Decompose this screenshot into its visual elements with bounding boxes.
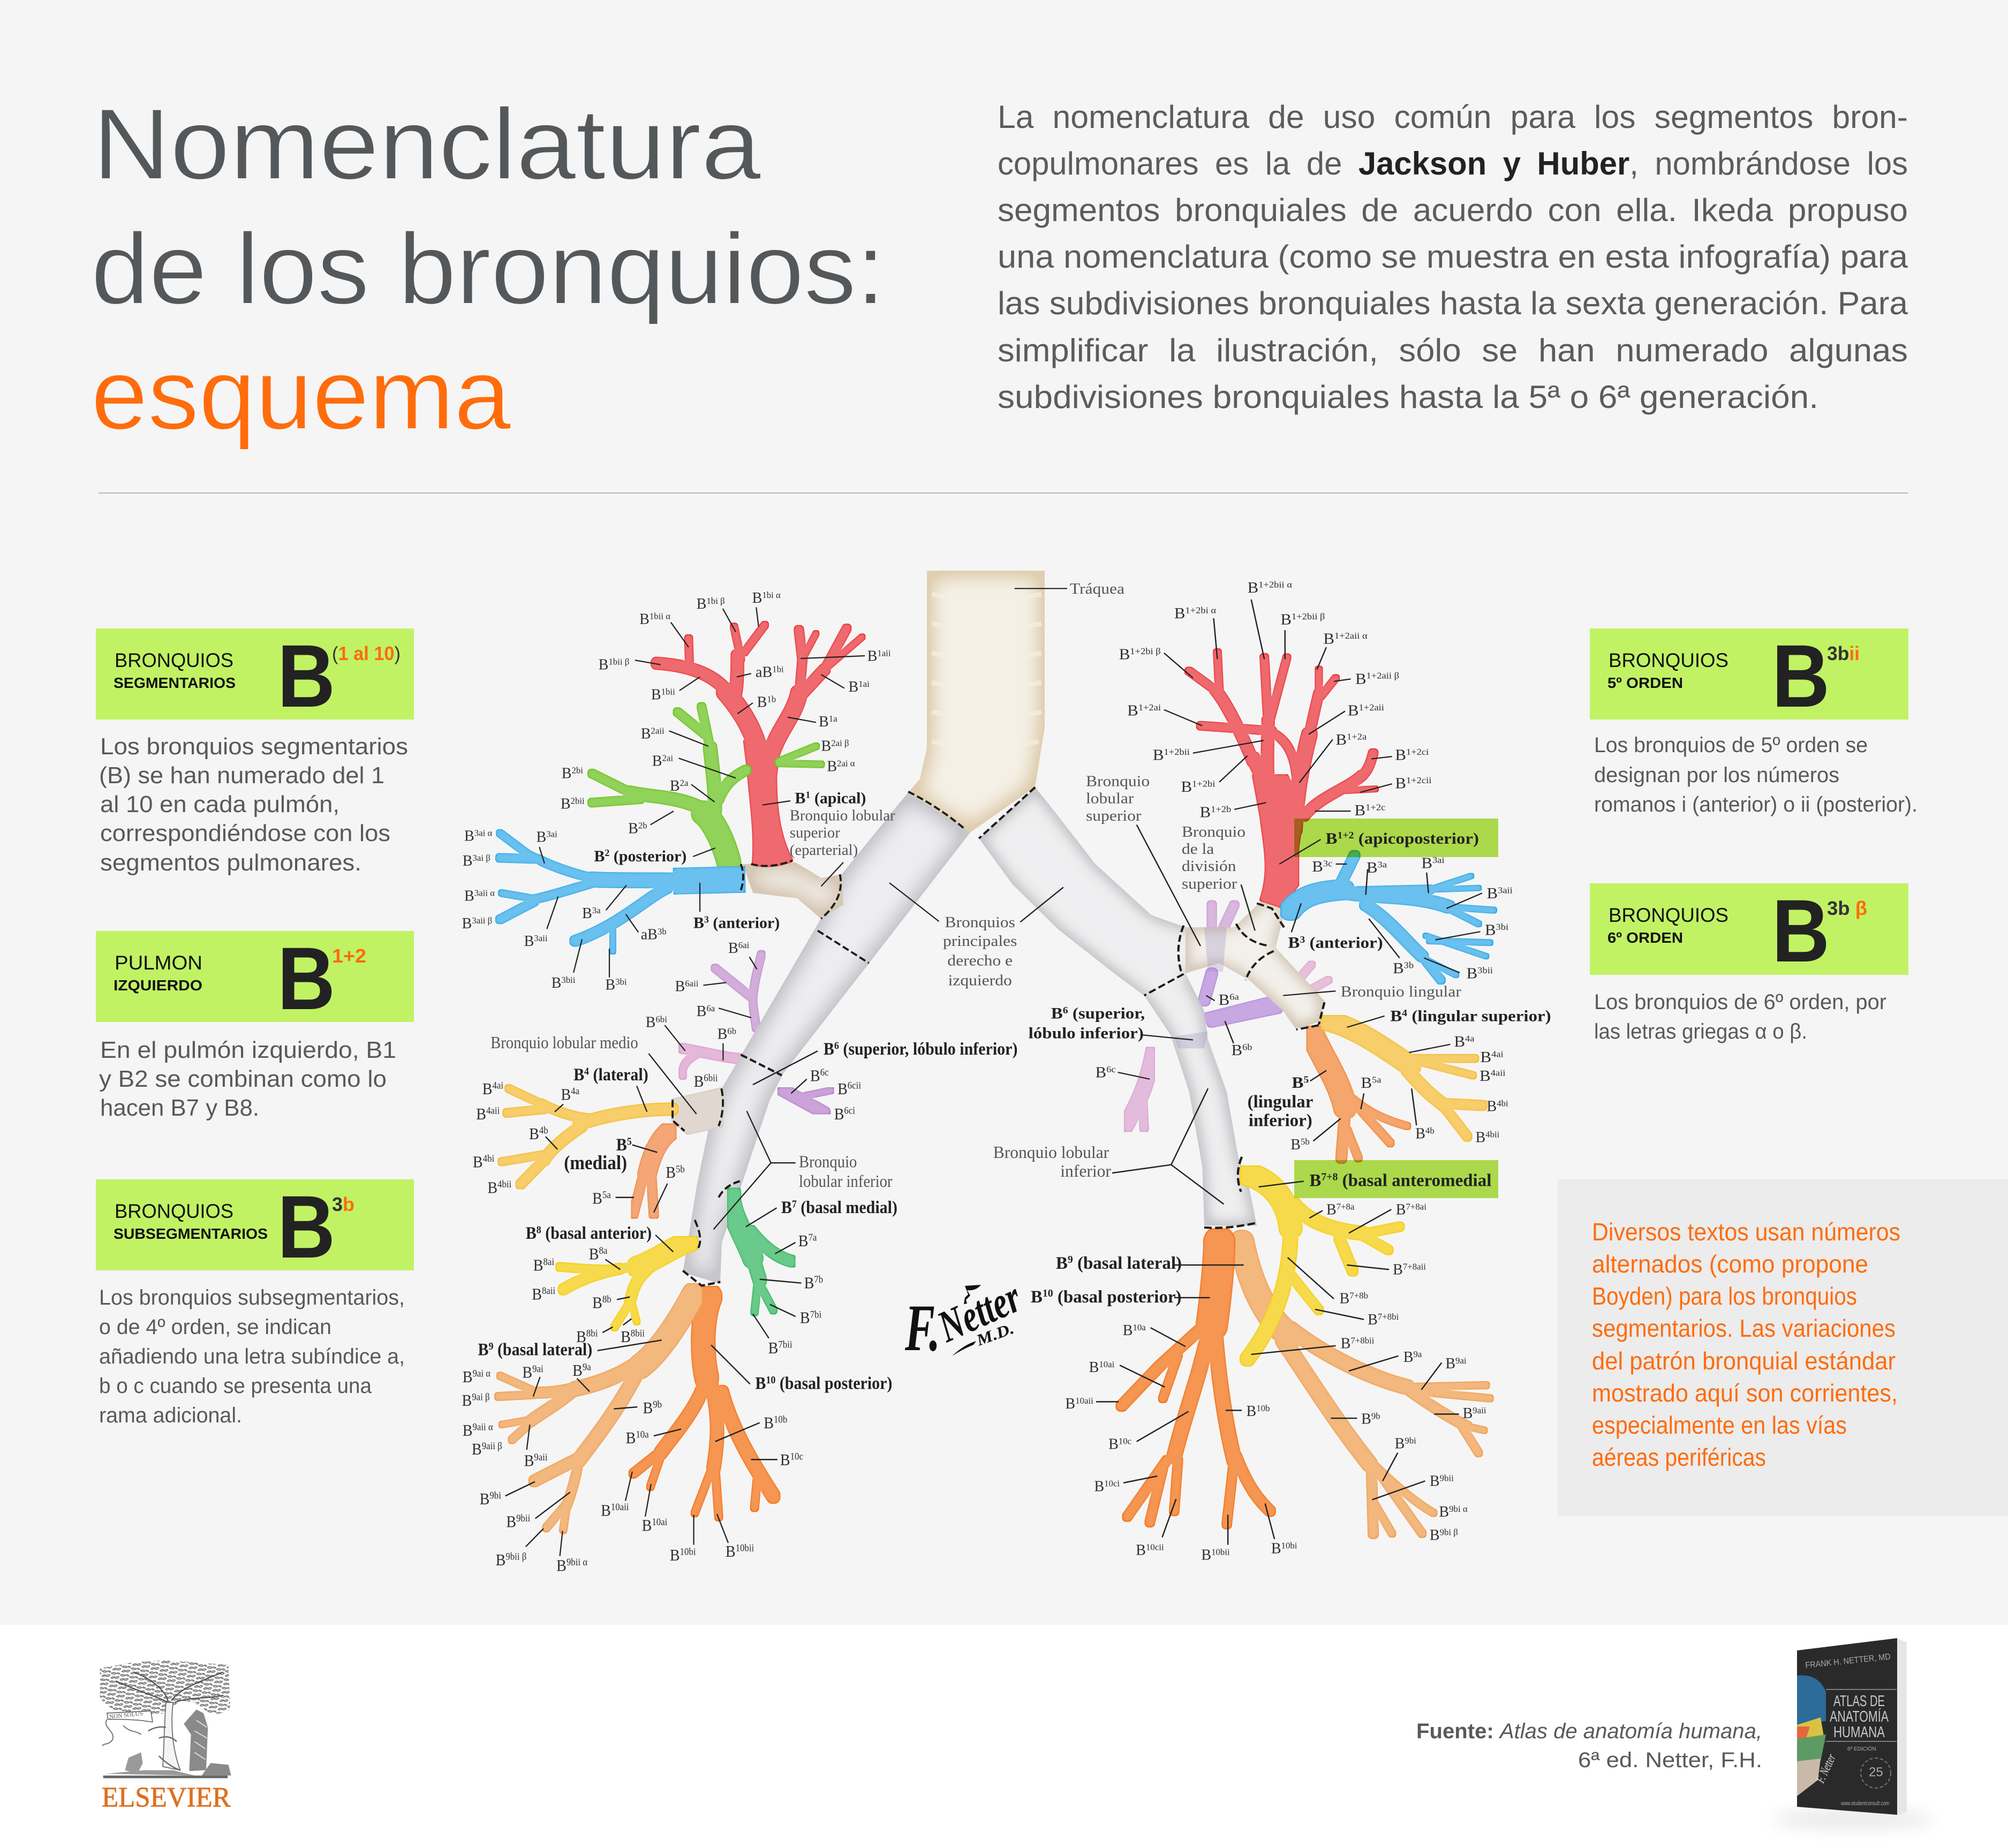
leader lines and labels: upper left: B2ai β [821, 738, 849, 754]
callout: textos alternativos: Diversos textos usan números [1592, 1218, 1900, 1246]
intro paragraph: La nomenclatura de uso común para los segmentos bron- [998, 99, 1908, 135]
leader lines and labels: lower left: B5b [666, 1163, 685, 1182]
panel: bronquios 6º orden [1590, 882, 1908, 1043]
leader lines and labels: lower left: B9bi [480, 1490, 501, 1508]
leader lines and labels: upper left: B6aii [675, 978, 699, 995]
panel: bronquios subsegmentarios: BRONQUIOS [115, 1200, 233, 1222]
leader lines and labels: upper right: B1+2c [1355, 802, 1385, 819]
leader lines and labels: upper left: B6bi [646, 1014, 667, 1031]
leader lines and labels: upper right: B1+2aii β [1355, 671, 1399, 687]
leader lines and labels: lower left: B9b [643, 1399, 662, 1417]
leader lines and labels: lower left: Bronquio lobular medio [490, 1033, 638, 1052]
branch: B7+8 basal anteromedial, yellow [1248, 1175, 1400, 1359]
leader lines and labels: lower right: inferior [1060, 1162, 1111, 1180]
icon: Elsevier tree: NON SOLUS [109, 1710, 144, 1721]
leader lines and labels: upper left: B3 (anterior) [693, 914, 780, 931]
title: esquema [91, 338, 511, 450]
leader lines and labels: upper right: B5a [1361, 1074, 1382, 1091]
leader lines and labels: lower left: B10b [764, 1414, 787, 1432]
book cover: 25 [1869, 1765, 1883, 1779]
panel: pulmon izquierdo: 1+2 [332, 945, 366, 967]
panel: bronquios subsegmentarios: 3b [332, 1193, 354, 1215]
panel: bronquios segmentarios: correspondiéndose con los [100, 820, 390, 846]
leader lines and labels: lower left: B10aii [601, 1502, 629, 1520]
panel: pulmon izquierdo: En el pulmón izquierdo, B1 [100, 1037, 396, 1063]
leader lines and labels: upper left: B1bi β [697, 596, 725, 612]
leader lines and labels: lower right: B10bii [1201, 1547, 1230, 1564]
branch: B10 basal posterior, orange [633, 1297, 773, 1517]
branch: B7 basal medial, green [730, 1194, 792, 1312]
leader lines and labels: upper left: B1aii [867, 648, 891, 665]
intro paragraph: las subdivisiones bronquiales hasta la sexta generación. Para [998, 285, 1908, 321]
leader lines and labels: upper left: B3aii β [462, 915, 492, 932]
leader lines and labels: upper right: B1+2bii α [1248, 580, 1292, 596]
leader lines and labels: upper right: B5 [1292, 1073, 1309, 1091]
leader lines and labels: upper right: B1+2bii [1153, 747, 1190, 763]
leader lines and labels: lower left: B10 (basal posterior) [755, 1373, 892, 1393]
leader lines and labels: lower right: B10ai [1089, 1359, 1115, 1376]
leader lines and labels: upper right: B1+2bi α [1174, 605, 1216, 622]
panel: bronquios segmentarios: segmentos pulmonares. [100, 850, 361, 876]
leader lines and labels: lower right: B9b [1361, 1411, 1380, 1428]
intro paragraph [998, 99, 1908, 415]
panel: pulmon izquierdo: hacen B7 y B8. [100, 1095, 259, 1121]
panel: bronquios subsegmentarios: b o c cuando se presenta una [99, 1374, 372, 1398]
panel: bronquios segmentarios: (B) se han numerado del 1 [99, 762, 384, 789]
leader lines and labels: lower left: B10bii [726, 1542, 754, 1561]
icon: Elsevier tree: ELSEVIER [102, 1782, 231, 1813]
leader lines and labels: lower right: B7+8a [1326, 1201, 1355, 1218]
leader lines and labels: lower left: B6cii [837, 1080, 861, 1098]
footer: source text: 6ª ed. Netter, F.H. [1578, 1748, 1762, 1772]
leader lines and labels: upper left: aB3b [641, 926, 667, 943]
dashed segment boundaries [673, 787, 1324, 1286]
leader lines and labels: lower right: B10b [1247, 1403, 1270, 1420]
leader lines and labels: lower left: B6c [810, 1066, 829, 1085]
intro paragraph: simplificar la ilustración, sólo se han numerado algunas [998, 332, 1908, 368]
title [91, 88, 885, 450]
leader lines and labels: upper left: B3a [582, 905, 601, 922]
leader lines and labels: lower left: B4b [529, 1125, 548, 1143]
leader lines and labels: upper right: B6b [1231, 1042, 1252, 1059]
branch: B4 lingular superior, gold [1328, 1021, 1482, 1137]
panel: bronquios 6º orden: B [1772, 882, 1830, 981]
main bronchus, image right [979, 787, 1324, 1225]
leader lines and labels: upper left: B1 (apical) [795, 789, 866, 807]
branch: B3 anterior right, blue [1290, 855, 1493, 980]
leader lines and labels: upper left: B2b [628, 820, 647, 837]
leader lines and labels: upper right: B1+2bi [1181, 778, 1215, 795]
leader lines and labels: upper right: lobular [1086, 790, 1134, 807]
branch: B3 anterior, blue [500, 834, 744, 951]
signature: F. Netter M.D.: M.D. [973, 1320, 1016, 1350]
leader lines and labels: lower left: Bronquio [799, 1152, 857, 1171]
leader lines and labels: upper right: B4 (lingular superior) [1390, 1007, 1551, 1025]
panel: bronquios 5º orden: designan por los números [1594, 763, 1839, 787]
leader lines and labels: upper left: B2 (posterior) [594, 847, 686, 865]
leader lines and labels: lower left: (medial) [564, 1152, 627, 1173]
panel: pulmon izquierdo: IZQUIERDO [114, 977, 202, 994]
leader lines and labels: lower left: B9a [572, 1361, 591, 1380]
leader lines and labels: upper right: principales [943, 932, 1017, 950]
signature: F. Netter M.D.: Netter [930, 1272, 1029, 1352]
footer: source text [1416, 1720, 1762, 1772]
panel: pulmon izquierdo: y B2 se combinan como lo [99, 1066, 387, 1092]
leader lines and labels: lower right: inferior) [1249, 1111, 1312, 1130]
panel: bronquios subsegmentarios: SUBSEGMENTARIOS [114, 1225, 268, 1242]
leader lines and labels: lower right: B7+8 (basal anteromedial [1309, 1171, 1491, 1191]
leader lines and labels: upper left: B2aii [641, 725, 665, 742]
leader lines and labels: lower right: (lingular [1248, 1092, 1313, 1111]
leader lines and labels: lower right: B7+8ai [1396, 1201, 1426, 1218]
leader lines and labels: upper left: B6b [718, 1026, 736, 1043]
leader lines and labels: upper left: B2ai α [827, 758, 855, 775]
leader lines and labels: lower left: B4ai [482, 1080, 503, 1098]
panel: pulmon izquierdo: B [277, 929, 335, 1028]
callout: textos alternativos: Boyden) para los bronquios [1592, 1282, 1857, 1310]
book cover: ATLAS DE [1833, 1693, 1885, 1710]
leader lines and labels: lower left: B9bii β [496, 1551, 526, 1570]
leader lines and labels: upper right: B3ai [1421, 855, 1445, 872]
panel: bronquios 5º orden: 3bii [1827, 642, 1860, 664]
leader lines and labels: lower left: lobular inferior [799, 1172, 892, 1191]
leader lines and labels: upper left: B6a [697, 1003, 715, 1020]
panel: bronquios 5º orden: B [1772, 627, 1830, 726]
signature: F. Netter M.D.: F. [904, 1291, 940, 1365]
leader lines and labels: upper right: B1+2bi β [1119, 646, 1161, 663]
leader lines and labels: lower left: B9bii [506, 1513, 530, 1531]
leader lines and labels: upper right [943, 580, 1551, 1091]
leader lines and labels: upper left: B3aii [524, 933, 548, 950]
branch: B5 lingular inferior, orange [1311, 1032, 1407, 1158]
leader lines and labels: upper left: B1ai [848, 679, 870, 695]
leader lines and labels: upper right: superior [1182, 875, 1237, 892]
leader lines and labels: lower left: B9ai [522, 1364, 543, 1382]
leader lines and labels: upper right: superior [1086, 807, 1141, 824]
panel: bronquios 5º orden [1590, 627, 1918, 816]
panel: bronquios 5º orden: BRONQUIOS [1609, 649, 1728, 671]
leader lines and labels: lower right: B7+8b [1339, 1290, 1368, 1307]
intro paragraph: copulmonares es la de Jackson y Huber, nombrándose los [998, 146, 1908, 181]
leader lines and labels: upper right: B1+2a [1335, 731, 1367, 748]
book cover: ANATOMÍA [1830, 1708, 1889, 1725]
book cover: 6ª EDICIÓN [1847, 1745, 1876, 1752]
leader lines and labels: lower left: B9 (basal lateral) [478, 1339, 592, 1359]
leader lines and labels: upper right: Bronquio [1182, 823, 1245, 840]
branch: B9 basal lateral, light orange [499, 1295, 693, 1530]
leader lines and labels: lower left: B4aii [476, 1105, 500, 1123]
leader lines and labels: upper right: Bronquio lingular [1341, 983, 1461, 1000]
leader lines and labels: upper right: B1+2aii [1348, 702, 1384, 719]
leader lines and labels: lower right: B7+8bii [1341, 1335, 1375, 1352]
leader lines and labels: lower left: B10ai [642, 1517, 667, 1535]
highlight boxes [1294, 819, 1498, 1198]
leader lines and labels: upper right: B1+2cii [1395, 775, 1431, 792]
leader lines and labels: upper left: B1bii α [639, 611, 670, 628]
leader lines and labels: upper left: B3bi [605, 976, 627, 994]
leader lines and labels: lower left: B7a [798, 1232, 817, 1250]
branch: B9 right, light orange [1242, 1243, 1490, 1534]
leader lines and labels: lower left: B4bii [487, 1178, 511, 1197]
leader lines and labels: upper left: B3ai [537, 829, 557, 846]
panel: bronquios 5º orden: romanos i (anterior) o ii (posterior). [1594, 793, 1918, 816]
leader lines and labels: upper left: B2bii [561, 796, 585, 813]
leader lines and labels: upper right: B3b [1393, 960, 1414, 977]
leader lines and labels: lower left: B4a [561, 1085, 579, 1104]
leader lines and labels: upper right: B6c [1096, 1064, 1116, 1081]
panel: bronquios segmentarios: B [277, 627, 335, 726]
leader lines and labels: upper right: B4a [1454, 1034, 1475, 1050]
leader lines and labels: lower right: B5b [1290, 1137, 1310, 1153]
leader lines and labels: lower right: B9 (basal lateral) [1056, 1254, 1182, 1273]
trachea [908, 571, 1045, 832]
leader lines and labels: upper left: B1bii β [599, 656, 629, 673]
title: Nomenclatura [93, 88, 761, 200]
leader lines and labels: upper right: división [1182, 857, 1236, 874]
branch: B4 lateral, gold [502, 1088, 673, 1184]
panel: bronquios subsegmentarios: rama adicional. [99, 1404, 242, 1427]
panel: bronquios 6º orden: las letras griegas α o β. [1594, 1020, 1807, 1043]
leader lines and labels: upper left: B3aii α [464, 888, 495, 904]
icon: Elsevier tree [100, 1661, 231, 1813]
branch: B2 posterior, green [592, 707, 821, 862]
leader lines and labels: lower left: B5a [592, 1190, 611, 1208]
leader lines and labels: lower left: B6bii [694, 1072, 718, 1090]
leader lines and labels: upper left: B1bi α [752, 590, 781, 607]
book cover: www.studentconsult.com [1840, 1800, 1889, 1807]
leader lines and labels: upper right: B3bii [1467, 965, 1493, 982]
leader lines and labels: lower right: B10aii [1065, 1396, 1093, 1412]
leader lines and labels: lower left: B8ai [533, 1256, 554, 1275]
panel: pulmon izquierdo [96, 929, 414, 1121]
signature: F. Netter M.D. [904, 1272, 1029, 1365]
leader lines and labels: lower right: B10ci [1094, 1478, 1120, 1495]
leader lines and labels: lower left: B4bi [473, 1153, 494, 1171]
leader lines and labels: lower left: B10c [780, 1451, 803, 1469]
panel: bronquios 6º orden: 3b β [1827, 897, 1867, 919]
panel: bronquios subsegmentarios: B [277, 1178, 335, 1277]
leader lines and labels: upper left: B2bi [562, 765, 583, 782]
leader lines and labels: upper right: B3aii [1486, 885, 1513, 902]
panel: bronquios segmentarios: SEGMENTARIOS [114, 675, 236, 691]
intro paragraph: subdivisiones bronquiales hasta la 5ª o 6ª generación. [998, 379, 1818, 415]
leader lines and labels: lower left: B10bi [670, 1546, 696, 1564]
leader lines and labels: lower right [993, 1071, 1508, 1564]
panel: bronquios segmentarios: BRONQUIOS [115, 649, 233, 671]
leader lines and labels: upper right: B4aii [1479, 1068, 1506, 1085]
leader lines and labels: upper left: B3ai α [464, 828, 492, 845]
pink B6 branches behind the airway [683, 905, 1328, 1128]
leader lines and labels: lower left: B9aii β [472, 1440, 502, 1459]
leader lines and labels: upper left: B3bii [552, 975, 576, 991]
leader lines and labels: upper left: B1a [819, 714, 837, 730]
panel: bronquios subsegmentarios: Los bronquios subsegmentarios, [99, 1286, 405, 1309]
callout: textos alternativos: mostrado aquí son corrientes, [1592, 1379, 1898, 1407]
leader lines and labels: lower left: B7b [804, 1274, 823, 1292]
leader lines and labels: upper right: B3bi [1485, 922, 1508, 938]
leader lines and labels: upper left: B2a [670, 778, 689, 794]
leader lines and labels: lower right: B9ai [1445, 1355, 1467, 1372]
leader lines and labels: upper right: B6 (superior, [1051, 1004, 1145, 1022]
leader lines and labels: lower right: B9bi [1395, 1435, 1416, 1452]
leader lines and labels: lower right: B9a [1403, 1349, 1422, 1366]
leader lines and labels: lower left: B9aii [524, 1451, 548, 1470]
leader lines and labels: lower right: B9bii [1430, 1473, 1454, 1489]
leader lines and labels: lower left: B9ai α [463, 1368, 490, 1386]
branch: B8 basal anterior, yellow [560, 1240, 691, 1327]
branch: B1 apical, red [657, 625, 862, 866]
leader lines and labels: upper right: Tráquea [1070, 580, 1124, 597]
panel: bronquios segmentarios [96, 627, 414, 876]
leader lines and labels: lower left: B10a [626, 1429, 649, 1448]
leader lines and labels: upper right: B1+2 (apicoposterior) [1326, 829, 1479, 847]
leader lines and labels: upper left: B1bii [651, 686, 675, 703]
leader lines and labels: upper left: B2ai [652, 753, 673, 769]
leader lines and labels: upper right: lóbulo inferior) [1029, 1024, 1144, 1042]
leader lines and labels: lower left: B9ai β [462, 1391, 490, 1410]
leader lines and labels: lower left: B8bii [621, 1328, 645, 1346]
leader lines and labels: lower left: B6ci [834, 1105, 855, 1123]
branch: B10 right, orange [1122, 1243, 1270, 1524]
panel: bronquios segmentarios: al 10 en cada pulmón, [100, 791, 339, 817]
footer: Elsevier logo [100, 1661, 231, 1813]
book cover [1772, 1638, 1933, 1828]
leader lines and labels: lower left: B8 (basal anterior) [526, 1223, 652, 1243]
leader lines and labels: lower right: B4bii [1475, 1129, 1500, 1146]
leader lines and labels: lower right: B4b [1415, 1125, 1435, 1142]
intro paragraph: una nomenclatura (como se muestra en esta infografía) para [998, 239, 1908, 275]
leader lines and labels: lower right: B10c [1108, 1436, 1131, 1453]
title: de los bronquios: [91, 213, 885, 325]
leader lines and labels: lower left: B5 [616, 1135, 632, 1154]
footer band [0, 1625, 2008, 1848]
leader lines and labels: lower right: B7+8bi [1368, 1312, 1399, 1328]
leader lines and labels: upper right: B3 (anterior) [1288, 934, 1383, 951]
leader lines and labels: upper right: B3c [1312, 859, 1332, 875]
leader lines and labels: lower left: B7bi [800, 1309, 821, 1327]
leader lines and labels: upper left: B1b [757, 694, 776, 711]
leader lines and labels: upper right: B1+2ai [1127, 702, 1161, 719]
leader lines and labels: lower right: B10cii [1136, 1542, 1164, 1559]
leader lines and labels: lower right: B4bi [1486, 1098, 1508, 1115]
leader lines and labels: lower right: B9aii [1463, 1405, 1486, 1422]
callout: textos alternativos: segmentarios. Las variaciones [1592, 1314, 1896, 1342]
leader lines and labels: lower left: B4 (lateral) [573, 1065, 648, 1084]
branch: B5 medial, orange [633, 1128, 674, 1214]
intro paragraph: segmentos bronquiales de acuerdo con ella. Ikeda propuso [998, 192, 1908, 228]
leader lines and labels: lower left [462, 1033, 1017, 1575]
book cover: HUMANA [1833, 1724, 1885, 1741]
leader lines and labels: lower right: Bronquio lobular [993, 1143, 1109, 1162]
leader lines and labels: upper right: B1+2ci [1395, 747, 1429, 763]
leader lines and labels: lower right: B7+8aii [1393, 1261, 1426, 1278]
callout: textos alternativos: alternados (como propone [1592, 1250, 1868, 1278]
leader lines and labels: upper left: aB1bi [756, 664, 784, 681]
leader lines and labels: lower left: B8b [592, 1294, 612, 1312]
panel: bronquios subsegmentarios [96, 1178, 414, 1427]
leader lines and labels: upper left: Bronquio lobular [790, 807, 895, 824]
bronchial tree diagram [462, 571, 1551, 1575]
leader lines and labels: lower left: B9aii α [463, 1421, 493, 1440]
leader lines and labels: upper right: B4ai [1481, 1049, 1504, 1066]
leader lines and labels: lower left: B7bii [768, 1339, 792, 1357]
leader lines and labels: upper right: de la [1182, 840, 1214, 858]
panel: bronquios 5º orden: 5º ORDEN [1607, 675, 1683, 691]
leader lines and labels: lower right: B10 (basal posterior) [1031, 1287, 1182, 1307]
panel: bronquios 6º orden: BRONQUIOS [1609, 904, 1728, 926]
leader lines and labels: lower right: B9bi β [1430, 1527, 1458, 1543]
callout: textos alternativos: del patrón bronquial estándar [1592, 1347, 1896, 1375]
panel: bronquios 6º orden: 6º ORDEN [1607, 929, 1683, 946]
leader lines and labels: upper right: izquierdo [948, 972, 1012, 989]
panel: bronquios subsegmentarios: o de 4º orden, se indican [99, 1315, 331, 1339]
panel: bronquios subsegmentarios: añadiendo una letra subíndice a, [99, 1345, 405, 1368]
leader lines and labels: upper left [462, 590, 939, 1061]
panel: bronquios 5º orden: Los bronquios de 5º orden se [1594, 733, 1868, 757]
leader lines and labels: upper left: B6ai [728, 940, 750, 957]
panel: bronquios 6º orden: Los bronquios de 6º orden, por [1594, 990, 1886, 1014]
leader lines and labels: upper right: B6a [1219, 991, 1239, 1008]
leader lines and labels: lower right: B10bi [1271, 1540, 1297, 1557]
leader lines and labels: upper right: B1+2b [1200, 804, 1231, 821]
leader lines and labels: lower right: B10a [1123, 1322, 1146, 1339]
panel: bronquios segmentarios: (1 al 10) [332, 642, 401, 664]
main bronchus and lobar branches, image left [673, 792, 970, 1284]
callout: textos alternativos [1557, 1179, 2008, 1516]
leader lines and labels: lower left: B8a [589, 1245, 608, 1263]
panel: bronquios segmentarios: Los bronquios segmentarios [100, 733, 408, 760]
leader lines and labels: upper right: B1+2bii β [1280, 611, 1325, 628]
footer: source text: Fuente: Atlas de anatomía humana, [1416, 1720, 1762, 1743]
leader lines and labels: upper right: Bronquios [945, 913, 1015, 931]
branch: B1+2 apicoposterior, red [1189, 653, 1375, 907]
book cover: F. Netter [1814, 1752, 1839, 1785]
leader lines and labels: upper right: B1+2aii α [1323, 631, 1368, 647]
leader lines and labels: lower left: B8aii [532, 1285, 555, 1304]
leader lines and labels: upper right: Bronquio [1086, 772, 1150, 790]
leader lines and labels: upper right: B3a [1367, 859, 1387, 876]
leader lines and labels: lower left: B9bii α [556, 1557, 587, 1575]
book cover: FRANK H. NETTER, MD [1805, 1652, 1891, 1670]
panel: pulmon izquierdo: PULMON [115, 952, 202, 974]
leader lines and labels: lower left: B7 (basal medial) [781, 1198, 897, 1217]
leader lines and labels: lower left: B8bi [576, 1328, 598, 1346]
leader lines and labels: lower right: B9bi α [1439, 1504, 1468, 1520]
leader lines and labels: lower left: B6 (superior, lóbulo inferior) [824, 1039, 1017, 1058]
leader lines and labels: upper right: derecho e [947, 952, 1013, 969]
leader lines and labels: upper left: superior [790, 824, 840, 841]
callout: textos alternativos: aéreas periféricas [1592, 1443, 1766, 1471]
callout: textos alternativos: especialmente en las vías [1592, 1411, 1847, 1439]
leader lines and labels: upper left: B3ai β [463, 853, 490, 869]
leader lines and labels: upper left: (eparterial) [790, 842, 858, 859]
